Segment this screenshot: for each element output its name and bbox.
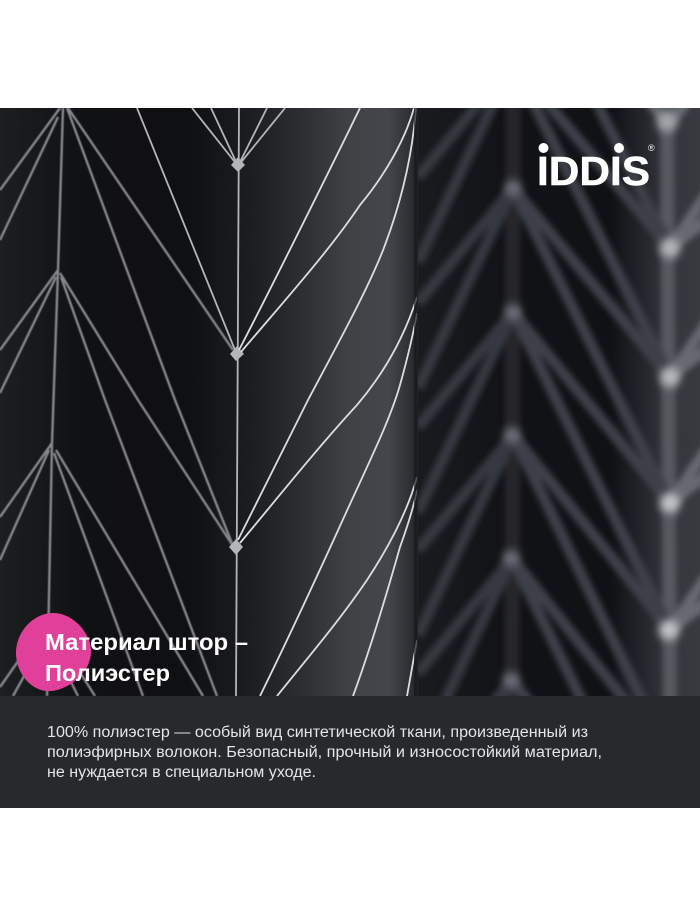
text block: description: 100% полиэстер — особый вид синтетической ткани, произведенный из (47, 724, 588, 741)
bright vertical column (667, 100, 670, 700)
thread junction nodes (229, 157, 245, 555)
text block: description (47, 724, 602, 781)
glowing junctions (503, 112, 680, 688)
heading: Полиэстер (45, 660, 170, 686)
panel: description band (0, 696, 700, 808)
chevron strands down-left (418, 108, 512, 696)
panel: blurred curtain background (418, 108, 700, 696)
text block: description: полиэфирных волокон. Безопасный, прочный и износостойкий материал, (47, 744, 602, 761)
chevron strands down-right (510, 108, 670, 696)
text block: description: не нуждается в специальном уходе. (47, 764, 316, 781)
heading: Материал штор – (45, 629, 248, 655)
icon: iddis logo: IDDIS (537, 148, 650, 194)
icon: pink accent blob (16, 613, 91, 691)
dim vertical column (512, 100, 513, 700)
panel: sharp curtain fabric (0, 108, 418, 696)
infographic canvas (0, 108, 700, 808)
blurred chevron pattern (418, 108, 700, 696)
strands rising to the right edge (644, 108, 700, 632)
heading (45, 629, 248, 686)
icon: iddis logo: ® (648, 143, 655, 153)
